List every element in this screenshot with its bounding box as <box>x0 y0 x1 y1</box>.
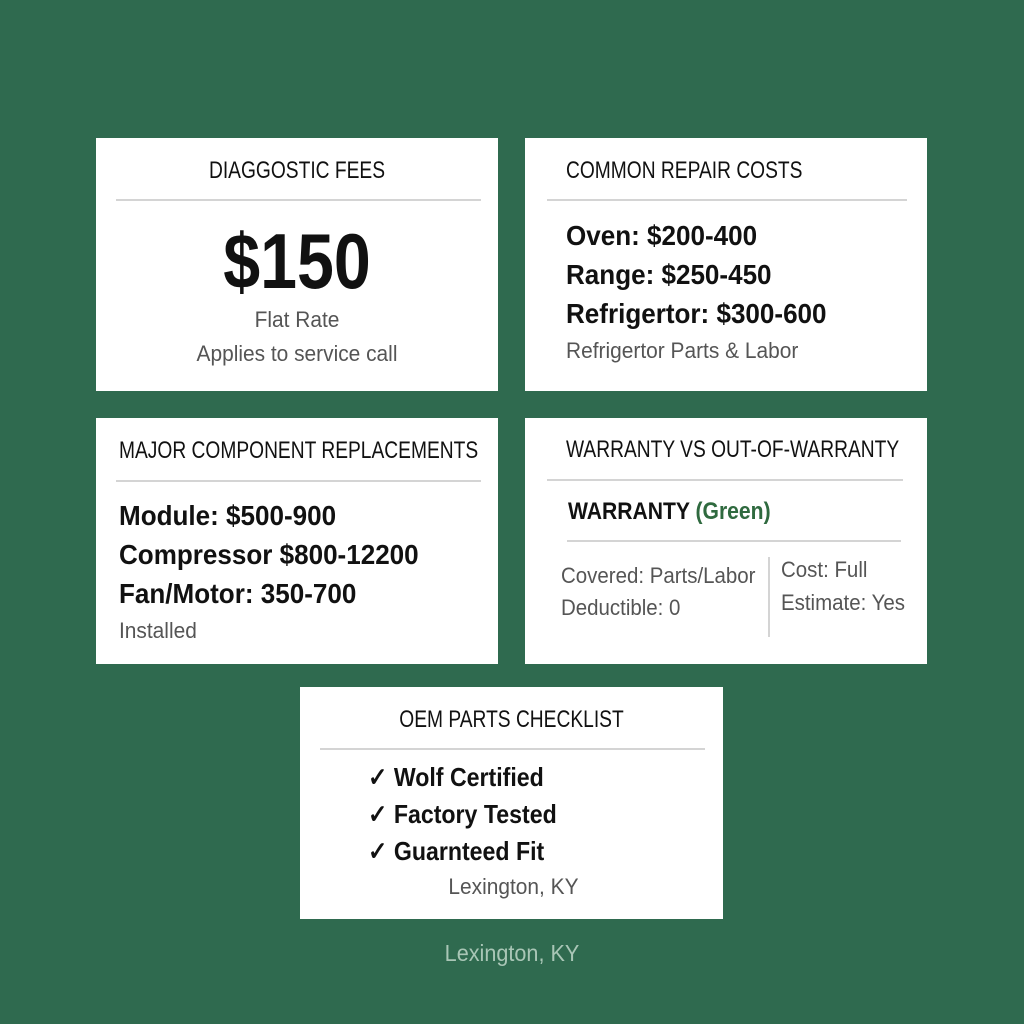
list: component costs: Compressor $800-12200 <box>119 539 419 570</box>
panel: major component replacements <box>96 418 498 664</box>
text: applies: Applies to service call <box>197 341 397 366</box>
panel: common repair costs <box>525 138 927 391</box>
checklist: ✓ Guarnteed Fit <box>368 836 544 866</box>
list: component costs: Module: $500-900 <box>119 500 336 531</box>
panel: OEM parts checklist <box>300 687 723 919</box>
heading: common repair costs: COMMON REPAIR COSTS <box>566 157 802 184</box>
panel: diagnostic fees <box>96 138 498 391</box>
checklist <box>368 762 557 866</box>
heading: major components: MAJOR COMPONENT REPLACEMENTS <box>119 437 478 464</box>
text: flat rate: Flat Rate <box>255 307 339 332</box>
list: repair costs: Range: $250-450 <box>566 259 772 290</box>
column: covered: Deductible: 0 <box>561 595 680 620</box>
footer: location: Lexington, KY <box>445 940 579 966</box>
list: component costs: Fan/Motor: 350-700 <box>119 578 356 609</box>
text: location: Lexington, KY <box>448 874 579 899</box>
list: repair costs: Oven: $200-400 <box>566 220 757 251</box>
list: repair costs <box>566 220 827 329</box>
column: covered: Covered: Parts/Labor <box>561 563 755 588</box>
heading: OEM parts: OEM PARTS CHECKLIST <box>399 706 624 733</box>
checklist: ✓ Wolf Certified <box>368 762 544 792</box>
column: cost: Cost: Full <box>781 557 867 582</box>
column: cost: Estimate: Yes <box>781 590 905 615</box>
panel: warranty vs out-of-warranty <box>525 418 927 664</box>
text: parts and labor: Refrigertor Parts & Labor <box>566 338 798 363</box>
text: installed: Installed <box>119 618 197 643</box>
list: component costs <box>119 500 419 609</box>
column: cost <box>781 557 905 615</box>
list: repair costs: Refrigertor: $300-600 <box>566 298 827 329</box>
column: covered <box>561 563 756 620</box>
heading: warranty vs: WARRANTY VS OUT-OF-WARRANTY <box>566 436 899 463</box>
checklist: ✓ Factory Tested <box>368 799 557 829</box>
heading: diagnostic fees: DIAGGOSTIC FEES <box>209 157 385 184</box>
subheading: warranty green: WARRANTY (Green) <box>568 498 771 525</box>
price: $150 <box>223 217 371 305</box>
